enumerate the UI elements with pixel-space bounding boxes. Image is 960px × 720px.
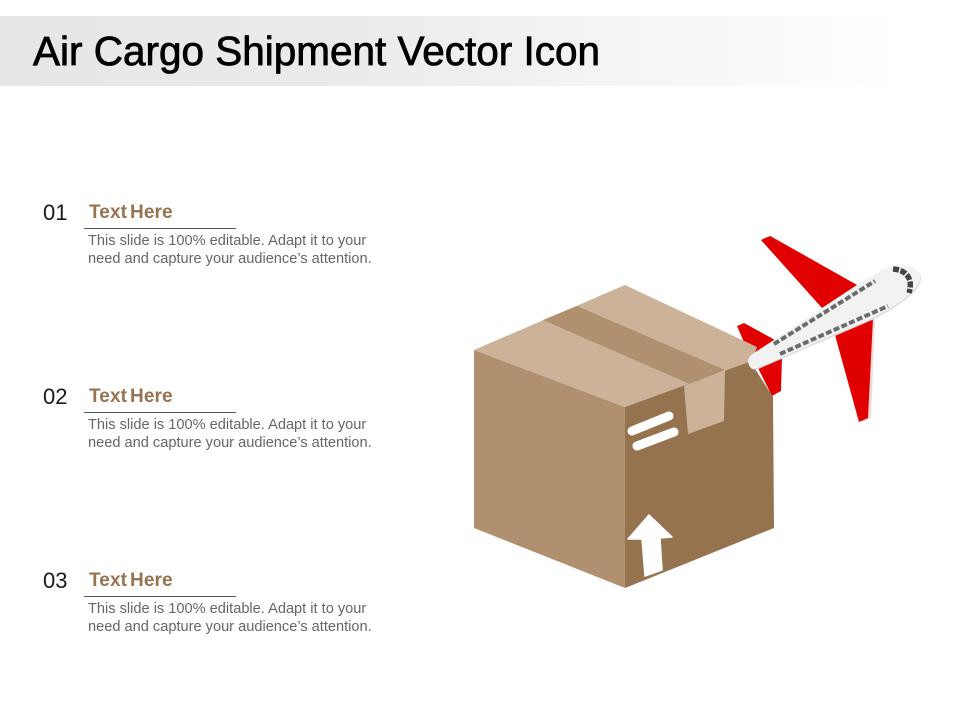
cockpit windows: [893, 269, 910, 293]
windows upper row: [774, 281, 875, 344]
number 03: 03: [43, 568, 67, 593]
windows lower row: [780, 306, 888, 354]
body text 03: [88, 601, 372, 635]
airplane: [748, 236, 921, 422]
body text 03: This slide is 100% editable. Adapt it to your: [88, 601, 366, 617]
body text 01: [88, 233, 372, 267]
rule 02: [84, 412, 236, 413]
number 02: 02: [43, 384, 67, 409]
body text 02: [88, 417, 372, 451]
body text 02: This slide is 100% editable. Adapt it to your: [88, 417, 366, 433]
title band: [0, 16, 900, 86]
number 01: 01: [43, 200, 67, 225]
fuselage: [748, 266, 920, 368]
cardboard box: [474, 285, 774, 588]
handling lines: [632, 416, 674, 446]
heading 01: Text Here: [89, 202, 173, 223]
packing tape on top: [543, 306, 725, 385]
body text 01: This slide is 100% editable. Adapt it to your: [88, 233, 366, 249]
list item 01: [43, 200, 372, 267]
body text 03: need and capture your audience’s attention.: [88, 619, 372, 635]
lower wing: [838, 318, 875, 422]
heading 02: Text Here: [89, 386, 173, 407]
list item 02: [43, 384, 372, 451]
list item 03: [43, 568, 372, 635]
airplane tail fins: [737, 323, 782, 396]
box top face: [474, 285, 757, 407]
upper wing: [763, 236, 859, 309]
rule 03: [84, 596, 236, 597]
body text 02: need and capture your audience’s attention.: [88, 435, 372, 451]
body text 01: need and capture your audience’s attention.: [88, 251, 372, 267]
fuselage shadow: [749, 267, 921, 370]
title: Air Cargo Shipment Vector Icon: [33, 28, 600, 74]
box right face: [625, 361, 774, 588]
box left face: [474, 350, 625, 588]
heading 03: Text Here: [89, 570, 173, 591]
rule 01: [84, 228, 236, 229]
this-way-up arrow: [628, 515, 672, 576]
packing tape flap: [684, 370, 725, 434]
